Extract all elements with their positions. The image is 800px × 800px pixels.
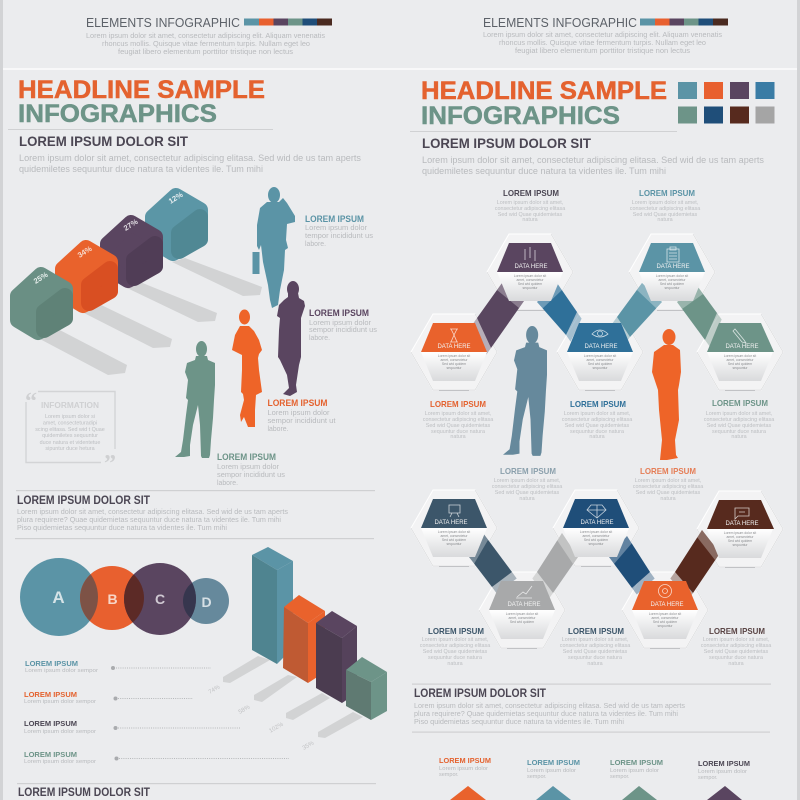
- hexagon: brown chat: amet, consectetur: [727, 535, 754, 539]
- cube: orange 34%: 34%: [76, 244, 94, 260]
- hexagon: grey chart: amet, consectetur: [509, 616, 536, 620]
- hexagon: purple candles: sequuntur: [522, 286, 538, 290]
- information quote box: Lorem ipsum dolor si: [45, 414, 95, 420]
- hex label: orange second row: Sed wid Quae quidemietas: [636, 490, 701, 496]
- bottom item: green: LOREM IPSUM: [610, 758, 663, 767]
- hexagon: purple candles: amet, consectetur: [517, 278, 544, 282]
- hex label: teal: Sed wid Quae quidemietas: [633, 212, 698, 218]
- label: teal person: LOREM IPSUM: [305, 214, 364, 224]
- hex label: orange: sequuntur duce natura: [431, 429, 485, 435]
- hexagon: brown chat: Sed wid quidem: [728, 539, 752, 543]
- isometric bar chart: [208, 547, 387, 752]
- hexagon: green pen: DATA HERE: [725, 344, 759, 350]
- hexagon: teal clipboard: amet, consectetur: [659, 278, 686, 282]
- section heading: venn and bars: Piso quidemietas sequuntur duce natura ta videntes ile. Tum mihi: [17, 525, 227, 532]
- hex label: slate: sequuntur duce natura: [428, 655, 482, 661]
- hex label: grey-blue: consectetur adipiscing elitasa: [492, 484, 562, 490]
- hexagon: purple candles: Sed wid quidem: [518, 282, 542, 286]
- icon: eye: [592, 330, 608, 337]
- hexagon: brown chat: DATA HERE: [725, 521, 759, 527]
- information quote box: ”: [104, 451, 116, 477]
- label: green person: LOREM IPSUM: [217, 452, 276, 462]
- hexagon: orange gear: sequuntur: [657, 624, 673, 628]
- section heading: bottom right: Lorem ipsum dolor sit amet, consectetur adipiscing elitasa. Sed wid de us tam aperts: [414, 703, 686, 710]
- hex label: purple: LOREM IPSUM: [503, 188, 559, 198]
- icon: gear: [658, 584, 672, 598]
- hex label: green: natura: [731, 434, 747, 440]
- hex label: brown: Lorem ipsum dolor sit amet,: [703, 637, 770, 643]
- legend with dotted leaders: Lorem ipsum dolor sempor: [24, 699, 96, 705]
- hex label: purple: [495, 188, 565, 223]
- information quote box: duce natura et videntetue: [40, 440, 100, 446]
- label: plum person: labore.: [309, 335, 330, 342]
- silhouette: orange woman: [232, 310, 262, 427]
- icon: diamond: [587, 505, 606, 518]
- label: orange person: Lorem ipsum dolor: [268, 410, 330, 417]
- legend with dotted leaders: [24, 659, 289, 765]
- cube: teal 12%: [153, 190, 200, 253]
- isometric bar chart: 58%: [238, 704, 252, 716]
- cube: teal 12%: 12%: [167, 190, 185, 206]
- hexagon outer frames: [411, 234, 783, 648]
- bar: green: [346, 657, 387, 720]
- legend with dotted leaders: LOREM IPSUM: [25, 659, 78, 668]
- bottom item: green: Lorem ipsum dolor: [610, 768, 659, 774]
- hex label: navy: natura: [587, 661, 603, 667]
- hex label: orange: Lorem ipsum dolor sit amet,: [425, 411, 492, 417]
- hex label: blue: Sed wid Quae quidemietas: [565, 423, 630, 429]
- hex label: orange second row: natura: [660, 496, 676, 502]
- title: left headline: HEADLINE SAMPLE: [18, 76, 265, 104]
- hexagon: grey chart: [489, 581, 555, 639]
- hexagon: green pen: Sed wid quidem: [728, 362, 752, 366]
- label: green person: Lorem ipsum dolor: [217, 464, 280, 471]
- silhouette: man with phone: [252, 187, 295, 308]
- hex label: grey-blue: Sed wid Quae quidemietas: [495, 490, 560, 496]
- icon: chat bubble: [735, 508, 749, 519]
- cube: orange 34%: [63, 244, 110, 305]
- bottom item: teal: Lorem ipsum dolor: [527, 768, 576, 774]
- hex label: teal: consectetur adipiscing elitasa: [630, 206, 700, 212]
- hexagon: slate screen: DATA HERE: [434, 520, 468, 526]
- label: orange person: LOREM IPSUM: [268, 398, 328, 408]
- colour swatches: [678, 82, 774, 124]
- title: right headline: [421, 77, 667, 130]
- hexagon: green pen: [707, 323, 774, 381]
- hex label: orange second row: Lorem ipsum dolor sit amet,: [635, 478, 702, 484]
- hexagon: blue eye: DATA HERE: [584, 344, 618, 350]
- hexagon: brown chat: Lorem ipsum dolor sit: [724, 531, 756, 535]
- hex label: navy: consectetur adipiscing elitasa: [560, 643, 630, 649]
- hex label: teal: Lorem ipsum dolor sit amet,: [632, 200, 699, 206]
- isometric bar chart: 102%: [268, 721, 285, 735]
- label: plum person: Lorem ipsum dolor: [309, 320, 372, 327]
- hexagon: teal clipboard: Sed wid quidem: [660, 282, 684, 286]
- bar: orange: [283, 595, 325, 683]
- venn diagram: D: [201, 594, 212, 610]
- bar: plum: [316, 611, 357, 703]
- hexagon: orange hourglass: Sed wid quidem: [442, 362, 466, 366]
- hex label: purple: natura: [522, 217, 538, 223]
- silhouette: green man: [175, 341, 215, 458]
- legend with dotted leaders: LOREM IPSUM: [24, 750, 77, 759]
- hexagon: navy diamond: Sed wid quidem: [584, 538, 608, 542]
- hex label: orange: LOREM IPSUM: [430, 399, 486, 409]
- intro text left: Lorem ipsum dolor sit amet, consectetur adipiscing elitasa. Sed wid de us tam aperts: [19, 153, 361, 163]
- header: right elements infographic: [483, 15, 728, 55]
- label: plum person: LOREM IPSUM: [309, 308, 369, 318]
- hex label: navy: LOREM IPSUM: [568, 626, 624, 636]
- icon: candlesticks: [525, 247, 535, 261]
- information quote box: INFORMATION: [41, 401, 99, 410]
- hexagon: orange gear: Lorem ipsum dolor sit: [649, 612, 681, 616]
- hexagon: orange hourglass: amet, consectetur: [441, 358, 468, 362]
- silhouette: plum woman: [277, 281, 305, 396]
- hexagon: orange hourglass: [421, 323, 487, 381]
- legend with dotted leaders: Lorem ipsum dolor sempor: [25, 668, 98, 674]
- label: green person: [217, 452, 286, 487]
- hexagon: teal clipboard: DATA HERE: [656, 264, 690, 270]
- isometric cube chart: [18, 190, 262, 375]
- section heading: venn and bars: plura requirere? Quae quidemietas sequuntur duce natura ta videntes ile. Tum mihi: [17, 517, 281, 524]
- bottom item: orange: LOREM IPSUM: [439, 756, 491, 765]
- hexagon: grey chart: DATA HERE: [507, 602, 541, 608]
- label: teal person: tempor incididunt us: [305, 233, 374, 240]
- hex label: orange: Sed wid Quae quidemietas: [426, 423, 491, 429]
- hexagon: green pen: sequuntur: [732, 366, 748, 370]
- title: left headline: [18, 76, 265, 128]
- isometric bar chart: 35%: [302, 740, 316, 752]
- hexagon: slate screen: [421, 499, 487, 557]
- hexagon: green pen: amet, consectetur: [727, 358, 754, 362]
- hexagon: grey chart: Sed wid quidem: [510, 620, 534, 624]
- hex label: navy: Sed wid Quae quidemietas: [563, 649, 628, 655]
- hexagon: orange gear: DATA HERE: [650, 602, 684, 608]
- label: green person: sempor incididunt us: [217, 472, 286, 479]
- hexagon: slate screen: Sed wid quidem: [442, 538, 466, 542]
- hex label: grey-blue: [492, 466, 562, 502]
- hex label: purple: Sed wid Quae quidemietas: [498, 212, 563, 218]
- bottom item: teal: LOREM IPSUM: [527, 758, 580, 767]
- hex label: green: Sed wid Quae quidemietas: [707, 423, 772, 429]
- hex label: green: sequuntur duce natura: [712, 429, 766, 435]
- section heading: bottom left: LOREM IPSUM DOLOR SIT: [18, 787, 150, 799]
- section heading: bottom right: Piso quidemietas sequuntur duce natura ta videntes ile. Tum mihi: [414, 719, 624, 726]
- hex label: grey-blue: Lorem ipsum dolor sit amet,: [494, 478, 561, 484]
- intro text right: LOREM IPSUM DOLOR SIT: [422, 135, 591, 151]
- hex label: navy: Lorem ipsum dolor sit amet,: [562, 637, 629, 643]
- header: left elements infographic: rhoncus mollis. Quisque vitae fermentum turpis. Nullam eget leo: [102, 41, 310, 48]
- hex label: blue: sequuntur duce natura: [570, 429, 624, 435]
- hexagon: brown chat: sequuntur: [732, 543, 748, 547]
- hexagon: blue eye: Sed wid quidem: [588, 362, 612, 366]
- bottom item: orange: Lorem ipsum dolor: [439, 766, 488, 772]
- label: orange person: sempor incididunt ut: [268, 418, 336, 425]
- hexagon: orange gear: Sed wid quidem: [653, 620, 677, 624]
- bottom item: green: sempor.: [610, 774, 630, 780]
- intro text left: [19, 133, 361, 174]
- hex label: orange second row: consectetur adipiscing elitasa: [633, 484, 703, 490]
- hex label: navy: [560, 626, 630, 667]
- hex label: slate: consectetur adipiscing elitasa: [420, 643, 490, 649]
- header: right elements infographic: ELEMENTS INFOGRAPHIC: [483, 15, 637, 30]
- hex label: orange second row: LOREM IPSUM: [640, 466, 696, 476]
- section heading: bottom right: plura requirere? Quae quidemietas sequuntur duce natura ta videntes ile. Tum mihi: [414, 711, 678, 718]
- icon: presentation screen: [449, 505, 460, 517]
- title: right headline: INFOGRAPHICS: [421, 102, 620, 130]
- hexagon: navy diamond: [563, 499, 629, 557]
- label: orange person: [268, 398, 336, 433]
- bottom item: plum: [698, 759, 750, 800]
- hexagon: purple candles: Lorem ipsum dolor sit: [514, 274, 546, 278]
- hex label: blue: LOREM IPSUM: [570, 399, 626, 409]
- legend with dotted leaders: LOREM IPSUM: [24, 690, 77, 699]
- hex label: orange: consectetur adipiscing elitasa: [423, 417, 493, 423]
- bottom item: plum: sempor.: [698, 775, 718, 781]
- hex label: blue: Lorem ipsum dolor sit amet,: [564, 411, 631, 417]
- hex label: slate: Sed wid Quae quidemietas: [423, 649, 488, 655]
- hex label: grey-blue: LOREM IPSUM: [500, 466, 556, 476]
- header: left elements infographic: Lorem ipsum dolor sit amet, consectetur adipiscing elit. Aliquam venenatis: [86, 33, 326, 40]
- hexagon: navy diamond: Lorem ipsum dolor sit: [580, 530, 612, 534]
- hex label: brown: [701, 626, 771, 667]
- hexagon: orange hourglass: Lorem ipsum dolor sit: [438, 354, 470, 358]
- hex label: teal: LOREM IPSUM: [639, 188, 695, 198]
- title: right headline: HEADLINE SAMPLE: [421, 77, 667, 105]
- hexagon: blue eye: Lorem ipsum dolor sit: [584, 354, 616, 358]
- bottom item: plum: Lorem ipsum dolor: [698, 769, 747, 775]
- header: left elements infographic: [86, 15, 332, 56]
- legend with dotted leaders: Lorem ipsum dolor sempor: [24, 729, 96, 735]
- intro text right: Lorem ipsum dolor sit amet, consectetur adipiscing elitasa. Sed wid de us tam aperts: [422, 155, 764, 165]
- icon: clipboard: [667, 247, 679, 262]
- information quote box: sipuntur duce hetura: [45, 446, 95, 452]
- hexagon: orange hourglass: sequuntur: [446, 366, 462, 370]
- venn diagram: C: [155, 591, 165, 607]
- hex label: slate: natura: [447, 661, 463, 667]
- hex label: brown: LOREM IPSUM: [709, 626, 765, 636]
- intro text right: [422, 135, 764, 176]
- hex label: slate: Lorem ipsum dolor sit amet,: [422, 637, 489, 643]
- hexagon: orange hourglass: DATA HERE: [437, 344, 471, 350]
- bottom item: orange: [439, 756, 491, 800]
- label: teal person: [305, 214, 374, 248]
- hexagon: orange gear: [632, 581, 698, 639]
- hex label: purple: Lorem ipsum dolor sit amet,: [497, 200, 564, 206]
- bottom item: green: [610, 758, 663, 800]
- hex label: navy: sequuntur duce natura: [568, 655, 622, 661]
- hexagon: navy diamond: DATA HERE: [580, 520, 614, 526]
- information quote box: scing elitasa. Sed wid t Quae: [35, 427, 105, 433]
- hex label: grey-blue: natura: [519, 496, 535, 502]
- hexagon: slate screen: amet, consectetur: [441, 534, 468, 538]
- label: orange person: labore.: [268, 426, 289, 433]
- label: teal person: labore.: [305, 241, 326, 248]
- venn diagram: B: [107, 591, 118, 607]
- silhouette: orange person: [652, 329, 681, 460]
- bottom item: plum: LOREM IPSUM: [698, 759, 750, 768]
- intro text left: LOREM IPSUM DOLOR SIT: [19, 133, 188, 149]
- hex label: green: LOREM IPSUM: [712, 398, 768, 408]
- bottom item: teal: [527, 758, 580, 800]
- intro text left: quidemiletes sequuntur duce natura ta videntes ile. Tum mihi: [19, 164, 263, 174]
- hexagon connectors row 1: [472, 283, 722, 354]
- section heading: venn and bars: Lorem ipsum dolor sit amet, consectetur adipiscing elitasa. Sed wid de us tam aperts: [17, 509, 289, 516]
- hex label: teal: [630, 188, 700, 223]
- intro text right: quidemiletes sequuntur duce natura ta videntes ile. Tum mihi: [422, 166, 666, 176]
- header: left elements infographic: ELEMENTS INFOGRAPHIC: [86, 15, 240, 30]
- venn diagram: [20, 558, 229, 636]
- section heading: venn and bars: LOREM IPSUM DOLOR SIT: [17, 495, 150, 507]
- hex label: purple: consectetur adipiscing elitasa: [495, 206, 565, 212]
- hexagon: navy diamond: amet, consectetur: [583, 534, 610, 538]
- hex label: blue: natura: [589, 434, 605, 440]
- venn diagram: A: [52, 588, 65, 607]
- hexagon connectors row 2: [469, 530, 720, 600]
- hex label: slate: [420, 626, 490, 667]
- hexagon: teal clipboard: sequuntur: [664, 286, 680, 290]
- hexagon: blue eye: [567, 323, 633, 381]
- header: right elements infographic: feugiat libero elementum porttitor tristique non lectus: [515, 48, 691, 55]
- hex label: green: consectetur adipiscing elitasa: [704, 417, 774, 423]
- hexagon: teal clipboard: [639, 243, 705, 301]
- hexagon: grey chart: Lorem ipsum dolor sit: [506, 612, 538, 616]
- title: left headline: INFOGRAPHICS: [18, 100, 217, 128]
- hexagon: blue eye: amet, consectetur: [587, 358, 614, 362]
- hexagon: brown chat: [707, 500, 774, 558]
- hex label: orange: [423, 399, 493, 440]
- hex label: orange second row: [633, 466, 703, 502]
- hexagon: teal clipboard: Lorem ipsum dolor sit: [656, 274, 688, 278]
- header: right elements infographic: Lorem ipsum dolor sit amet, consectetur adipiscing elit. Aliquam venenatis: [483, 32, 723, 39]
- hex label: orange: natura: [450, 434, 466, 440]
- hexagon: slate screen: sequuntur: [446, 542, 462, 546]
- information quote box: amet, consecteturadipi: [43, 420, 97, 426]
- label: plum person: sempor incididunt us: [309, 327, 378, 334]
- hex label: green: [704, 398, 774, 440]
- label: green person: labore.: [217, 480, 238, 487]
- hexagon: navy diamond: sequuntur: [588, 542, 604, 546]
- hexagon: blue eye: sequuntur: [592, 366, 608, 370]
- label: teal person: Lorem ipsum dolor: [305, 225, 368, 232]
- hex label: green: Lorem ipsum dolor sit amet,: [706, 411, 773, 417]
- cube: plum 27%: 27%: [122, 217, 140, 233]
- hex label: brown: consectetur adipiscing elitasa: [701, 643, 771, 649]
- section heading: venn and bars: [17, 495, 289, 532]
- hex label: brown: natura: [728, 661, 744, 667]
- isometric bar chart: 74%: [208, 684, 222, 696]
- bar: teal: [252, 547, 293, 664]
- hexagon: green pen: Lorem ipsum dolor sit: [724, 354, 756, 358]
- hex label: brown: sequuntur duce natura: [709, 655, 763, 661]
- cube: green 25%: [18, 270, 65, 332]
- icon: hourglass: [450, 329, 458, 342]
- hex label: teal: natura: [657, 217, 673, 223]
- hex label: blue: consectetur adipiscing elitasa: [562, 417, 632, 423]
- label: plum person: [309, 308, 378, 342]
- bottom item: teal: sempor.: [527, 774, 547, 780]
- header: left elements infographic: feugiat libero elementum porttitor tristique non lectus: [118, 49, 294, 56]
- bottom item: orange: sempor.: [439, 772, 459, 778]
- legend with dotted leaders: Lorem ipsum dolor sempor: [24, 759, 96, 765]
- icon: line chart: [516, 586, 532, 598]
- cube: green 25%: 25%: [32, 270, 50, 286]
- legend with dotted leaders: LOREM IPSUM: [24, 719, 77, 728]
- information quote box: quidemiletes sequuntur: [42, 433, 98, 439]
- cube: plum 27%: [108, 217, 155, 280]
- hexagon: purple candles: DATA HERE: [514, 264, 548, 270]
- hexagon: purple candles: [497, 243, 563, 301]
- silhouette: slate man: [503, 326, 547, 456]
- information quote box: [25, 389, 116, 477]
- section heading: bottom right: LOREM IPSUM DOLOR SIT: [414, 688, 546, 700]
- hex label: slate: LOREM IPSUM: [428, 626, 484, 636]
- section heading: bottom right: [414, 688, 686, 726]
- hex label: blue: [562, 399, 632, 440]
- information quote box: “: [25, 389, 37, 415]
- icon: pen: [733, 329, 746, 343]
- hexagon: orange gear: amet, consectetur: [652, 616, 679, 620]
- hexagon: slate screen: Lorem ipsum dolor sit: [438, 530, 470, 534]
- hex label: brown: Sed wid Quae quidemietas: [704, 649, 769, 655]
- header: right elements infographic: rhoncus mollis. Quisque vitae fermentum turpis. Nullam eget leo: [499, 40, 706, 47]
